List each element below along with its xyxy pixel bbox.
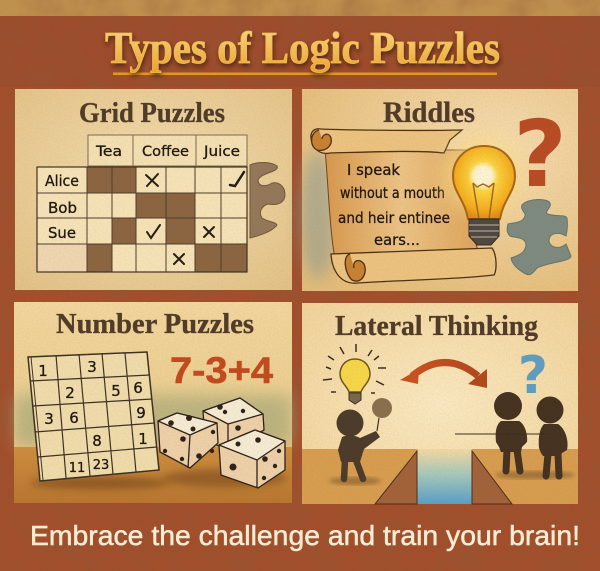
grid column labels: Tea [95,144,122,160]
riddle text: ears... [374,231,420,249]
title banner [0,16,600,87]
panel: riddles [300,89,578,291]
grid column labels [95,144,240,160]
grid marks [146,172,244,264]
sudoku digits [38,358,148,476]
riddle text: without a mouth [340,184,445,202]
watercolour shading [300,150,336,280]
sudoku digits: 5 [111,382,121,400]
sudoku digits: 2 [65,384,75,402]
icon: light bulb [442,133,526,245]
heading: grid puzzles: Grid Puzzles [79,98,225,129]
grid row labels: Sue [48,224,76,242]
cliffs and water [302,449,578,504]
riddle text: I speak [347,161,400,179]
sudoku digits: 9 [136,404,146,422]
grid row labels [45,172,79,242]
heading: number puzzles: Number Puzzles [56,309,254,340]
top parchment strip [0,0,600,16]
panel: number puzzles [14,302,292,503]
caption: Embrace the challenge and train your brain! [30,520,580,551]
person: left with balloon [329,398,392,485]
sudoku digits: 11 [69,461,85,476]
sudoku digits: 6 [69,409,79,427]
sudoku sheet [28,352,170,489]
arrow: curved two-way [400,362,487,388]
riddle text: and heir entinee [338,209,450,227]
sudoku digits: 6 [133,379,143,397]
icon: dice [158,398,287,488]
sudoku digits: 8 [92,432,102,450]
watercolour band [14,395,292,445]
grid row labels: Bob [48,199,77,217]
table top [14,447,292,503]
grid column labels: Juice [203,144,240,160]
panel: lateral thinking [302,303,578,504]
grid column labels: Coffee [142,144,189,160]
sudoku digits: 23 [93,458,109,473]
title: Types of Logic Puzzles [105,23,500,73]
sudoku digits: 3 [44,410,54,428]
people: right pair [455,392,575,479]
panel: grid puzzles [15,89,292,290]
icon: blue question mark: ? [518,346,548,406]
icon: idea bulb with rays [323,344,386,404]
sudoku digits: 1 [138,430,148,448]
logic grid [37,135,247,272]
grid row labels: Alice [45,172,79,190]
scroll with riddle [311,129,496,283]
sudoku digits: 3 [87,358,97,376]
icon: question mark: ? [513,101,567,208]
riddle text [338,161,450,249]
puzzle piece: brown [250,162,285,238]
sudoku digits: 1 [38,362,48,380]
equation: 7-3+4 [170,350,273,391]
puzzle piece: blue-grey [507,199,571,275]
heading: lateral thinking: Lateral Thinking [335,310,538,342]
heading: riddles: Riddles [383,96,475,129]
